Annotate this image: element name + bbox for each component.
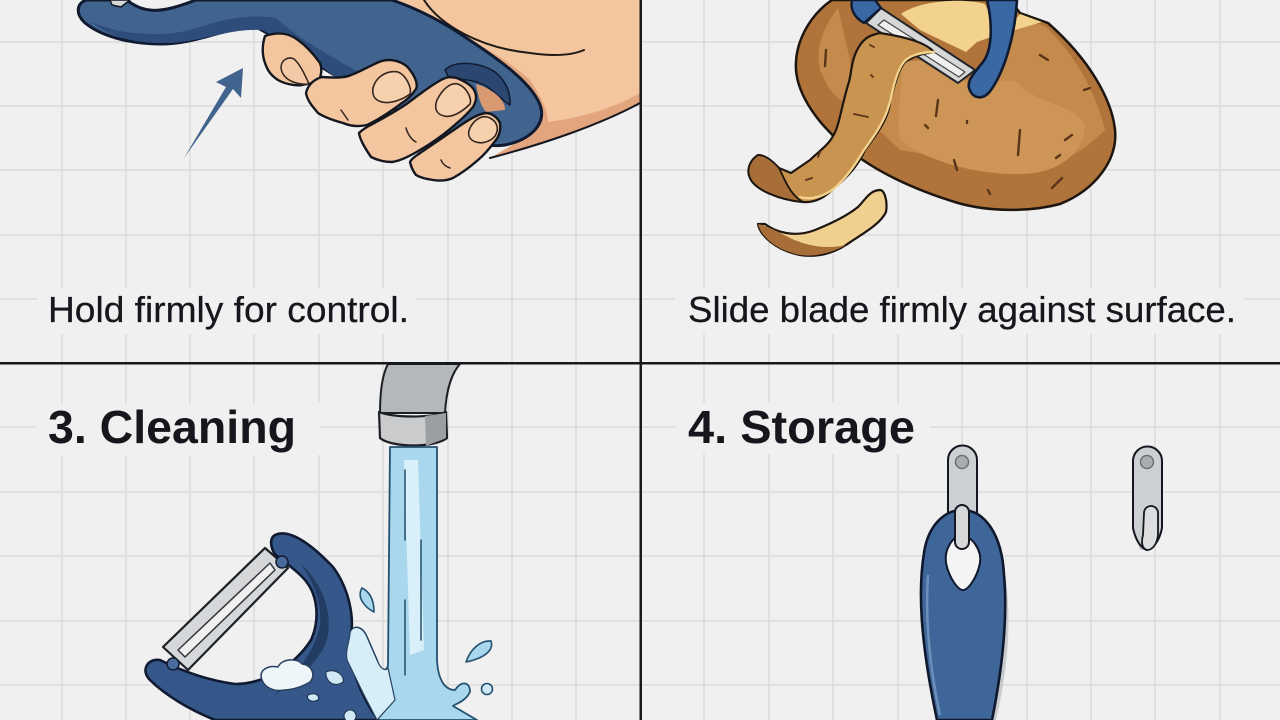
thumb crease (424, 0, 584, 55)
arrow pointing to grip (184, 68, 243, 158)
potato highlight (899, 60, 1085, 174)
little nail (469, 117, 497, 143)
panel 1: grip (48, 0, 640, 330)
index finger (263, 33, 321, 85)
blade slot (178, 563, 275, 657)
handle slot (445, 63, 510, 105)
blade (866, 8, 975, 83)
peeler handle (145, 533, 378, 720)
inner palm under slot (476, 84, 505, 112)
illustration: empty hook (1132, 446, 1162, 550)
handle dark band (275, 563, 329, 695)
panel 3: cleaning (48, 364, 492, 720)
hook screw (956, 456, 968, 468)
blade slot (878, 20, 965, 77)
hanging handle (921, 510, 1005, 720)
small peel dark edge (758, 224, 846, 256)
hook pin (955, 505, 969, 549)
caption: hold: Hold firmly for control. (48, 289, 409, 330)
peel flecks (806, 45, 874, 180)
long peel (748, 33, 934, 202)
handle hole (946, 536, 980, 590)
suds spots (308, 671, 356, 720)
small peel (758, 190, 887, 256)
little finger (410, 113, 500, 181)
droplet round (482, 684, 492, 694)
illustration: potato (748, 0, 1115, 256)
illustration: peeler on hook (921, 446, 1009, 720)
pivots (167, 556, 288, 670)
ring finger (359, 77, 476, 162)
hand palm (392, 0, 640, 158)
water highlight (404, 460, 424, 655)
heading: cleaning: 3. Cleaning (48, 401, 296, 453)
ring nail (436, 84, 470, 116)
hook tip (1142, 506, 1158, 550)
illustration: faucet and water (145, 364, 492, 720)
peeler arm right (969, 0, 1017, 97)
palm shading (465, 37, 640, 158)
peel dark end (748, 155, 803, 202)
middle nail (373, 72, 410, 103)
hook shadow (1132, 460, 1146, 550)
droplet right (466, 641, 492, 662)
potato spots (825, 50, 1090, 194)
collar shade (425, 413, 446, 446)
hanging handle shadow (985, 545, 1009, 720)
peeled flesh (901, 1, 991, 52)
blade fragment (110, 0, 130, 7)
faucet collar (379, 412, 447, 446)
foam splash (347, 627, 395, 720)
droplet left (360, 588, 374, 612)
handle highlight (927, 575, 940, 715)
knuckle creases (341, 110, 450, 168)
faucet spout (380, 364, 460, 413)
handle shadow (92, 16, 370, 92)
heading: storage: 4. Storage (688, 401, 915, 453)
water lines (405, 470, 421, 675)
foam on handle (261, 660, 313, 691)
peeler arm left (852, 0, 881, 23)
panel 2: peeling potato (688, 0, 1236, 330)
peeler handle (78, 0, 542, 146)
hook screw (1140, 456, 1154, 468)
potato body (796, 0, 1115, 210)
palm outline (490, 103, 640, 158)
caption: slide: Slide blade firmly against surface. (688, 289, 1236, 330)
illustration: hand gripping peeler (78, 0, 640, 181)
hook plate (1133, 446, 1162, 550)
middle finger (306, 60, 417, 126)
water stream (347, 447, 477, 720)
peeler blade (163, 548, 288, 670)
index nail (281, 58, 309, 84)
hook plate (948, 446, 977, 520)
peel edge (800, 52, 934, 198)
potato upper tone (819, 8, 1105, 172)
panel 4: storage (688, 401, 1162, 720)
